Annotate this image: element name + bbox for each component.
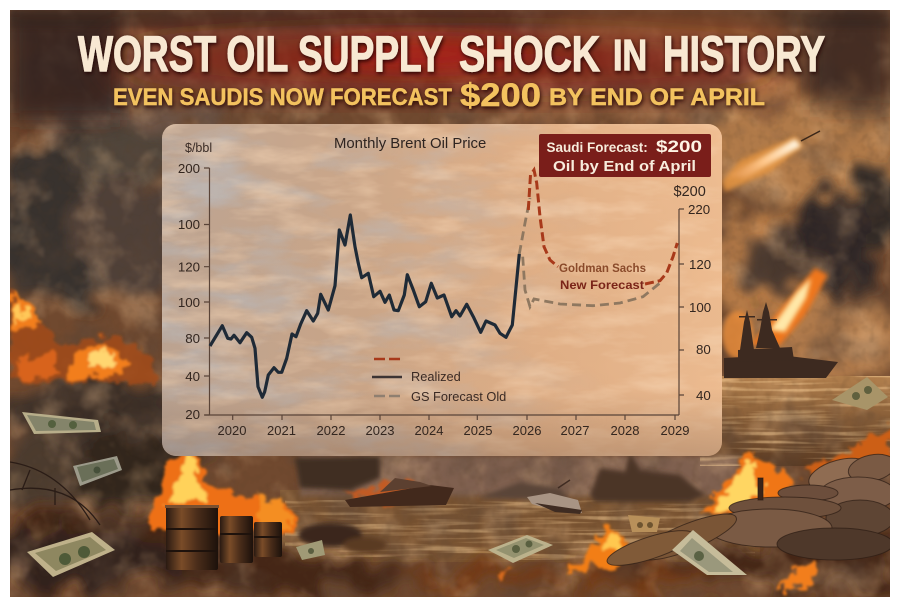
sea <box>280 376 890 562</box>
subtitle: BY END OF APRIL <box>549 84 765 111</box>
legend: GS Forecast Old <box>411 389 506 404</box>
x axis with years: 2026 <box>513 423 541 438</box>
x axis with years: 2020 <box>218 423 246 438</box>
legend: Realized <box>411 369 461 384</box>
left axis: 40 <box>185 369 200 384</box>
x axis with years: 2021 <box>267 423 296 438</box>
left axis: 120 <box>178 260 200 274</box>
left axis: 20 <box>185 407 200 422</box>
warship: right <box>724 302 838 378</box>
right axis: 40 <box>696 388 711 403</box>
fences and barbed wire <box>10 462 100 525</box>
bill 4 <box>296 540 325 560</box>
bill 1 <box>22 412 101 434</box>
legend <box>372 359 506 404</box>
panel: chart card <box>162 124 722 456</box>
callout: Saudi forecast: $200 <box>656 137 702 156</box>
ship left center <box>345 478 454 507</box>
title <box>78 26 825 82</box>
debris pile <box>298 523 387 553</box>
bill 7 <box>672 530 747 575</box>
sky: warm haze <box>40 85 900 380</box>
left axis: 200 <box>178 161 200 176</box>
patrol boat <box>527 480 582 514</box>
x axis with years <box>205 415 689 438</box>
flames: lower right <box>495 425 890 590</box>
annotation: Goldman Sachs new forecast: Goldman Sachs <box>559 261 646 275</box>
right axis <box>674 184 711 415</box>
subtitle: $200 <box>460 77 541 113</box>
left axis <box>178 141 212 422</box>
x axis with years: 2029 <box>661 423 689 438</box>
annotation: Goldman Sachs new forecast <box>559 261 646 292</box>
bill 8 <box>832 377 888 410</box>
series: GS new forecast dashed <box>528 170 677 284</box>
right axis: 220 <box>688 202 710 217</box>
callout: Saudi forecast: Oil by End of April <box>553 159 696 175</box>
sandbags <box>606 454 890 566</box>
x axis with years: 2027 <box>561 423 589 438</box>
title: IN <box>613 31 647 80</box>
left axis: 100 <box>178 217 200 232</box>
flames: left shore <box>10 290 158 382</box>
chart heading: Monthly Brent Oil Price <box>334 136 486 152</box>
burning wreck: center left flames <box>345 480 430 505</box>
x axis with years: 2024 <box>415 423 443 438</box>
missile with fire trail <box>722 131 820 192</box>
bill 3 <box>27 532 115 577</box>
right axis: 80 <box>696 342 711 357</box>
x axis with years: 2025 <box>464 423 492 438</box>
dollar bills scattered <box>22 377 888 577</box>
left axis: 80 <box>185 331 200 346</box>
x axis with years: 2023 <box>366 423 394 438</box>
annotation: Goldman Sachs new forecast: New Forecast <box>560 278 644 292</box>
callout: Saudi forecast <box>539 134 711 177</box>
title: HISTORY <box>663 26 825 82</box>
x axis with years: 2022 <box>317 423 345 438</box>
subtitle: EVEN SAUDIS NOW FORECAST <box>113 84 452 111</box>
title band: dark edges and red glow <box>10 10 890 120</box>
bill 6 <box>628 515 660 532</box>
left axis: $/bbl <box>185 141 212 155</box>
barrels <box>165 505 282 570</box>
bill 5 <box>488 535 553 563</box>
left axis: 100 <box>178 295 200 310</box>
subtitle <box>113 77 765 113</box>
distant ships: center <box>295 452 705 502</box>
series: old GS forecast dashed <box>519 198 660 307</box>
series: realized price line <box>210 215 519 397</box>
right axis: 120 <box>689 257 711 272</box>
bill 2 <box>73 456 122 486</box>
callout: Saudi forecast: Saudi Forecast: <box>546 140 648 155</box>
x axis with years: 2028 <box>611 423 639 438</box>
title: SHOCK <box>459 26 600 82</box>
right axis: 100 <box>689 300 711 315</box>
title: WORST OIL SUPPLY <box>78 26 443 82</box>
flames: behind barrels <box>150 440 295 535</box>
right axis: $200 <box>674 184 706 200</box>
dark smoke right <box>734 146 890 309</box>
flame plume above warship <box>722 268 828 359</box>
burnt ground <box>0 510 890 592</box>
dark smoke left <box>0 124 195 510</box>
